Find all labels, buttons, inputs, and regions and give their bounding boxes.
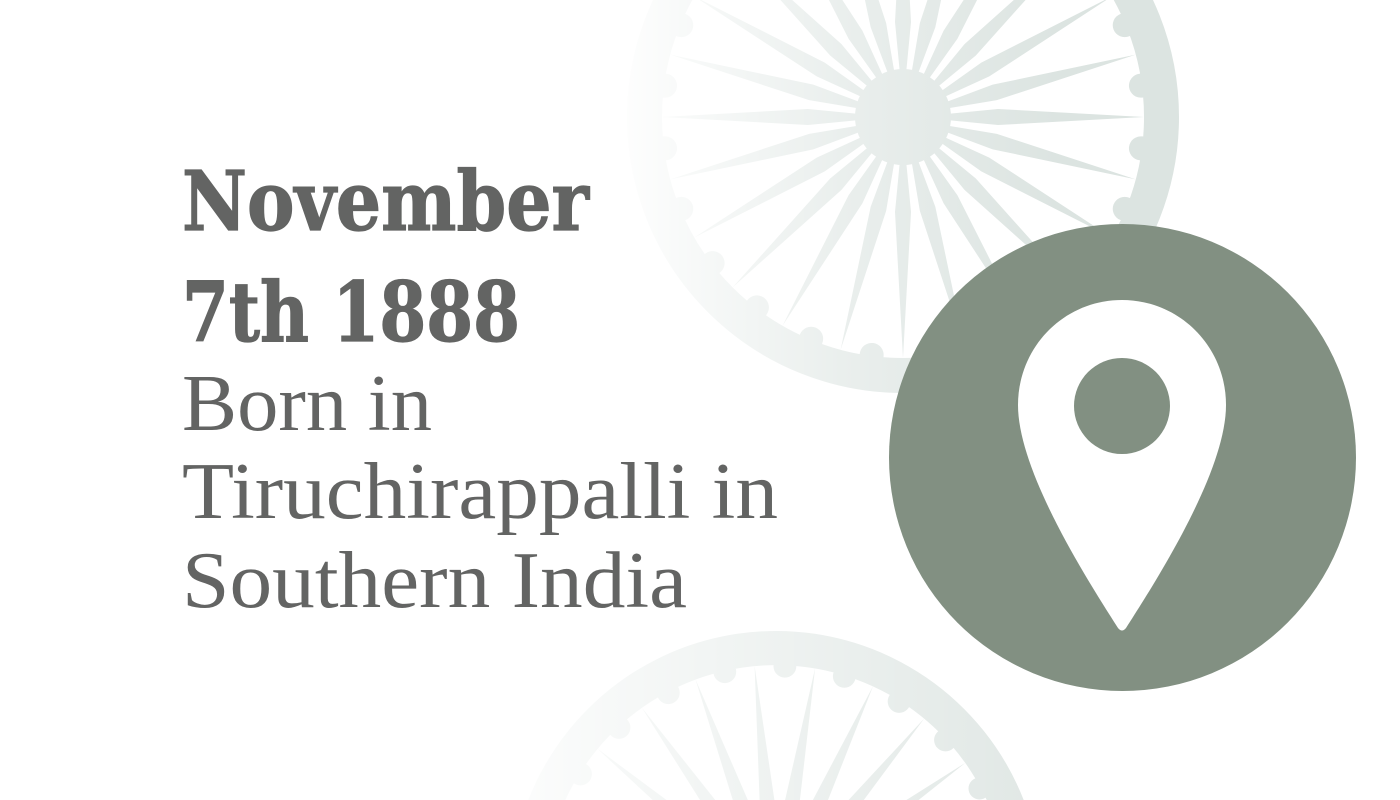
pin shape (1018, 300, 1226, 630)
pin centre dot (1074, 358, 1170, 454)
text: birthplace line 3: Southern India (182, 537, 687, 625)
text: birthplace line 1: Born in (182, 360, 432, 448)
background wheel: top chakra (620, 0, 1190, 400)
text: birthplace line 2: Tiruchirappalli in (182, 448, 778, 536)
icon: location pin in circle (889, 224, 1356, 691)
heading: date line 2: 7th 1888 (182, 265, 520, 361)
heading: date line 1: November (182, 154, 591, 250)
text block: date and birthplace (182, 154, 778, 625)
background wheel: bottom chakra (515, 625, 1040, 800)
icon background circle (889, 224, 1356, 691)
